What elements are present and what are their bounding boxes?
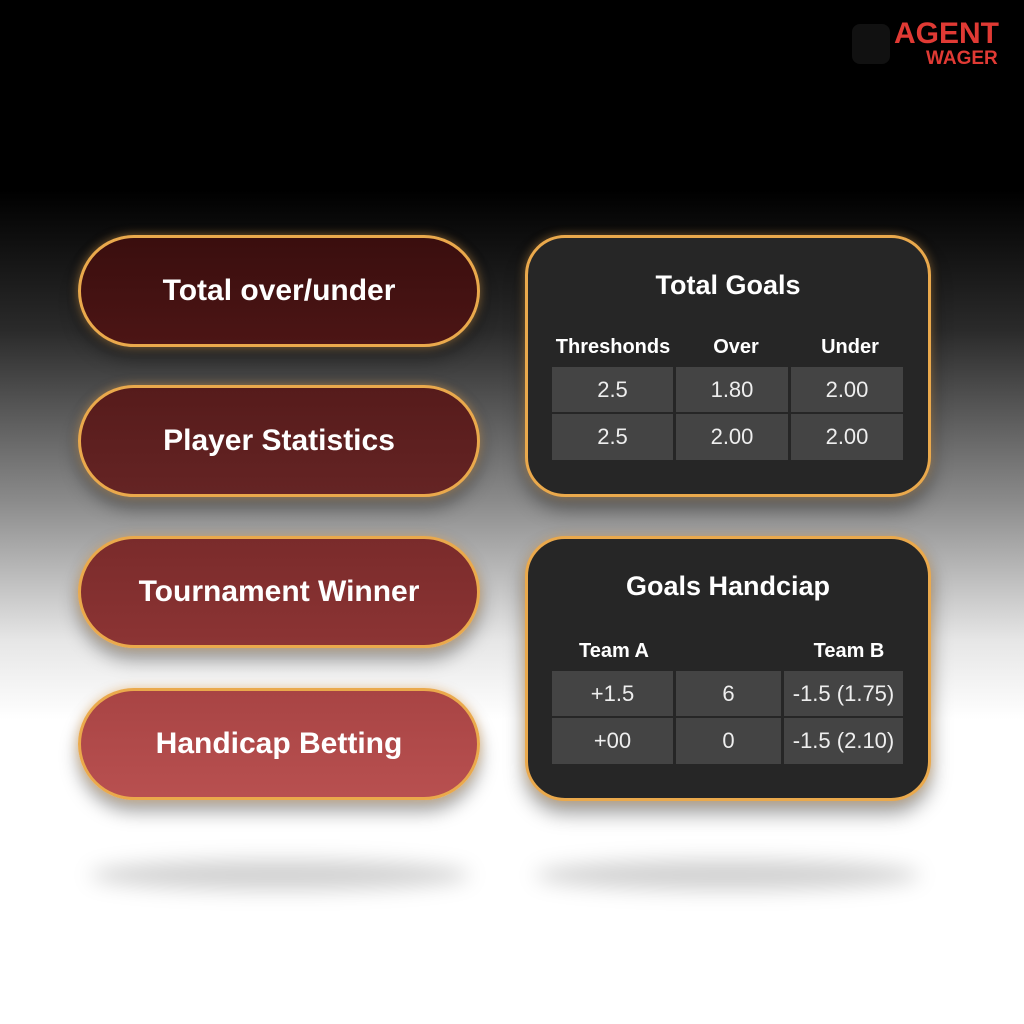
table: 6 (722, 680, 735, 706)
pill: Tournament Winner: Tournament Winner (139, 575, 419, 608)
table: 2.00 (826, 424, 868, 449)
table: 2.00 (711, 424, 753, 449)
panel: Goals Handicap (525, 536, 931, 801)
panel: Total Goals (525, 235, 931, 497)
table headers: Under (821, 336, 879, 358)
pill: Player Statistics: Player Statistics (163, 424, 395, 457)
table headers: Team B (814, 640, 884, 662)
logo (852, 17, 999, 69)
table: 2.5 (597, 424, 628, 449)
heading: Total Goals (655, 270, 801, 300)
logo text: AGENT (894, 17, 999, 50)
table headers (556, 336, 879, 358)
pill: Player Statistics (78, 385, 480, 497)
table headers: Threshonds (556, 336, 670, 358)
table headers (579, 640, 884, 662)
pill: Handicap Betting (78, 688, 480, 800)
logo icon (852, 24, 890, 64)
table: 0 (722, 728, 735, 753)
pill: Tournament Winner (78, 536, 480, 648)
table headers: Over (713, 336, 759, 358)
pill: Handicap Betting: Handicap Betting (156, 727, 402, 760)
heading: Goals Handciap (626, 571, 830, 601)
table headers: Team A (579, 640, 649, 662)
pill: Total over/under: Total over/under (163, 274, 395, 307)
table: 2.00 (826, 376, 868, 402)
logo: WAGER (926, 48, 998, 69)
table: 2.5 (597, 376, 628, 402)
table: +00 (594, 728, 631, 753)
table: +1.5 (591, 680, 634, 706)
table (552, 671, 903, 764)
table: -1.5 (1.75) (793, 680, 894, 706)
table: 1.80 (711, 376, 753, 402)
table (552, 367, 903, 460)
pill: Total over/under (78, 235, 480, 347)
table: -1.5 (2.10) (793, 728, 894, 753)
